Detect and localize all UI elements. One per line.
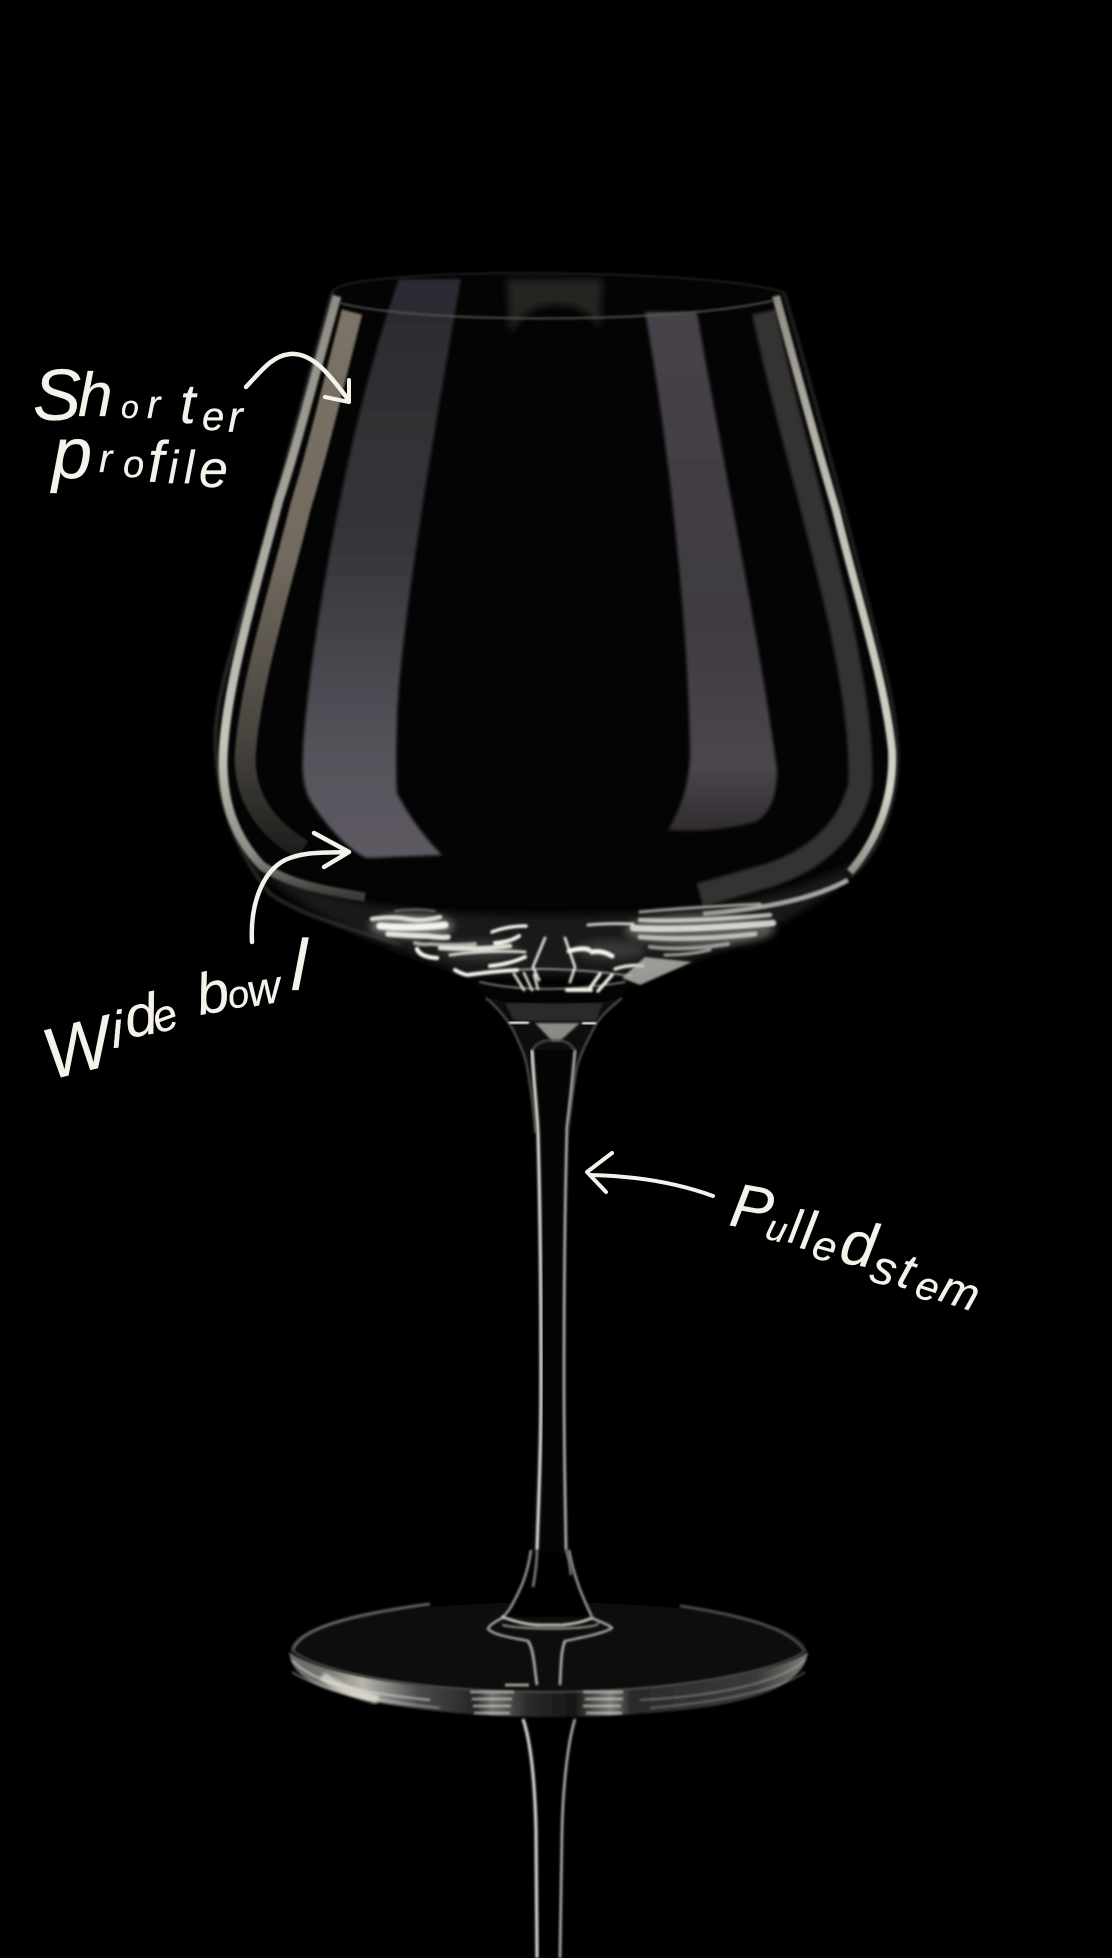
foot upper surface [290, 1602, 806, 1694]
label: profile: p [50, 414, 92, 494]
neck grey band [505, 1003, 603, 1021]
label: Wide bowl: d [119, 981, 164, 1051]
wine glass [215, 273, 898, 1958]
foot refraction blocks [470, 1685, 623, 1713]
reflected stem right line [560, 1719, 575, 1958]
arrow: shorter profile [246, 354, 349, 402]
label: Shorter: r [147, 383, 162, 427]
stem left highlight [532, 1050, 541, 1550]
left bright edge [223, 296, 365, 897]
label: Shorter: e [202, 395, 224, 439]
label: Wide bowl: l [291, 926, 309, 1006]
label: profile: o [123, 444, 144, 486]
label: profile: e [199, 441, 228, 499]
left window reflection [303, 279, 461, 858]
neck outlines [486, 998, 622, 1133]
flare inner lines [533, 1550, 571, 1587]
stem body [530, 1050, 576, 1553]
arrow: pulled stem [587, 1153, 713, 1196]
right inner band [700, 312, 860, 895]
foot bright arc [322, 1676, 378, 1700]
right bright edge [776, 296, 892, 872]
label: Shorter: S [33, 356, 81, 436]
label: Wide bowl: w [243, 959, 287, 1017]
neck arch [532, 1040, 575, 1052]
bowl body [215, 273, 898, 1000]
label: profile: f [148, 430, 170, 495]
foot front edge [292, 1650, 806, 1692]
flare highlights [502, 1550, 592, 1618]
neck body [486, 998, 622, 1133]
label: Pulled stem: d [836, 1208, 884, 1282]
reflected stem left line [523, 1719, 537, 1958]
label: Shorter: h [78, 361, 112, 430]
foot [289, 1550, 808, 1717]
label: Shorter: r [228, 393, 245, 442]
label: Pulled stem: u [762, 1206, 792, 1251]
foot rim streaks [292, 1660, 805, 1708]
label: Pulled stem: t [892, 1242, 924, 1300]
stem right highlight [564, 1050, 575, 1550]
label: Pulled stem: s [865, 1240, 904, 1298]
label: Pulled stem: l [797, 1199, 821, 1262]
rim back line [333, 273, 784, 292]
centre back reflection [507, 279, 602, 335]
bowl [215, 273, 898, 1000]
left outer halo [215, 291, 400, 945]
label: Wide bowl: e [145, 989, 184, 1043]
foot rim highlight left [293, 1604, 430, 1650]
arrow: wide bowl [252, 833, 349, 942]
foot collar [488, 1617, 612, 1641]
ripple glow [370, 914, 775, 960]
grey base patch [622, 957, 692, 985]
label: profile: r [99, 437, 114, 481]
foot lower rim band [289, 1652, 808, 1717]
label: Pulled stem: l [785, 1201, 806, 1255]
rim front line [340, 300, 775, 318]
neck triangle [535, 1023, 580, 1041]
lower right rim band [703, 880, 848, 914]
label: Pulled stem: e [910, 1263, 945, 1311]
label: Shorter: o [121, 389, 139, 425]
stem reflection below foot [523, 1719, 575, 1958]
label: Wide bowl: b [191, 958, 234, 1028]
label: profile: l [184, 441, 196, 493]
label: Pulled stem: m [934, 1260, 986, 1321]
label: Wide bowl: i [108, 1001, 127, 1060]
label: Wide bowl: W [35, 1000, 126, 1096]
lower bowl haze [250, 860, 860, 975]
label: Pulled stem: P [726, 1171, 778, 1246]
stem neck [486, 998, 622, 1133]
left brown band [245, 312, 352, 850]
label: profile: i [168, 441, 180, 493]
label: Pulled stem: e [808, 1220, 842, 1272]
foot rim highlight right [680, 1606, 804, 1650]
right window reflection [645, 312, 777, 831]
base ripples [372, 904, 773, 991]
label: Shorter: t [180, 372, 198, 435]
stem [530, 1050, 576, 1553]
label: Wide bowl: o [224, 973, 252, 1018]
stem refraction inside foot [528, 1641, 565, 1685]
neck highlights [509, 1022, 596, 1024]
right outer halo [784, 292, 898, 877]
foot neck flare [503, 1553, 590, 1617]
